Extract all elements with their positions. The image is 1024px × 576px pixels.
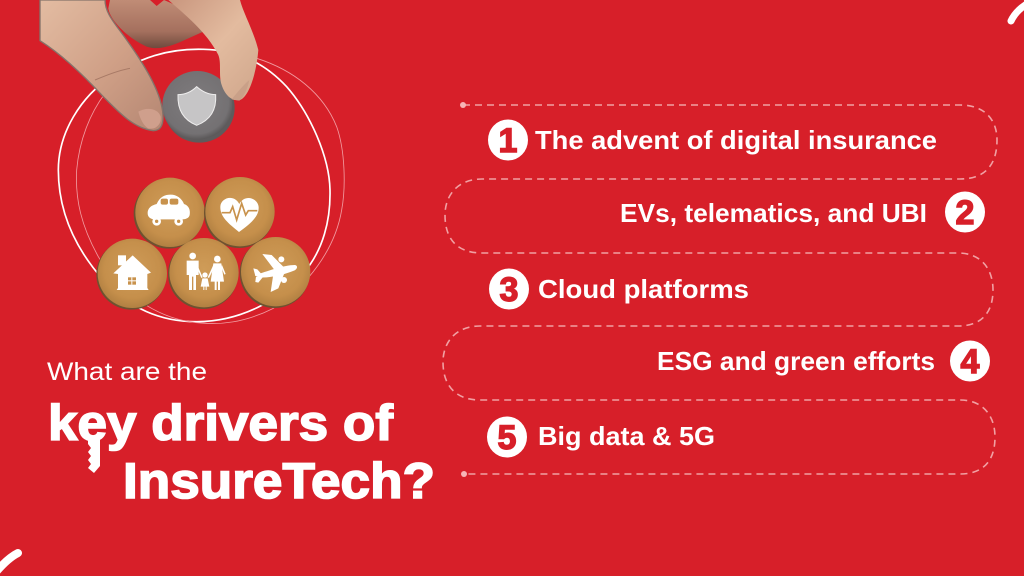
number badge 2	[945, 192, 985, 232]
path end dot	[461, 471, 467, 477]
index fingernail	[232, 80, 249, 101]
corner accent: top right	[1011, 2, 1024, 21]
icon: heart	[220, 198, 259, 232]
path start dot	[460, 102, 466, 108]
icon: key blade	[88, 438, 100, 473]
corner accent: bottom left	[0, 553, 18, 572]
number badge 4: 4	[961, 343, 980, 381]
item 5	[487, 416, 715, 458]
number badge 2: 2	[956, 194, 974, 232]
knuckle crease	[95, 68, 130, 80]
title	[47, 358, 435, 509]
coin: shield	[162, 71, 235, 143]
icon: car	[148, 195, 190, 226]
hand	[40, 0, 258, 131]
coin: house	[96, 239, 167, 310]
coin: car	[134, 178, 205, 249]
thumb and palm	[40, 0, 163, 131]
coin: family	[168, 238, 239, 309]
winding dashed path	[443, 102, 997, 477]
title line: What are the: What are the	[47, 358, 207, 386]
thick white loop	[58, 49, 330, 322]
icon: family	[187, 253, 226, 290]
icon: plane	[253, 254, 297, 292]
middle finger	[108, 0, 203, 48]
coin: heart	[204, 177, 275, 248]
item 4	[657, 340, 990, 382]
label 4: ESG and green efforts	[657, 346, 935, 376]
coin: plane	[240, 237, 310, 308]
label 3: Cloud platforms	[538, 274, 749, 304]
number badge 4	[950, 340, 990, 382]
icon: house	[113, 255, 151, 290]
item 3	[489, 268, 749, 310]
label 2: EVs, telematics, and UBI	[620, 198, 927, 228]
title line: key drivers of: key drivers of	[48, 395, 393, 451]
number badge 1	[488, 120, 528, 160]
number badge 1: 1	[499, 122, 517, 160]
number badge 5: 5	[498, 419, 516, 457]
item 1	[488, 120, 937, 160]
icon: shield	[178, 87, 216, 125]
label 5: Big data & 5G	[538, 421, 715, 451]
title line: InsureTech?: InsureTech?	[123, 453, 435, 509]
number badge 3	[489, 268, 529, 310]
item 2	[620, 192, 985, 232]
label 1: The advent of digital insurance	[535, 125, 937, 155]
thumbnail	[138, 109, 161, 129]
illustration: hand placing shield coin above insurance coins	[40, 0, 344, 324]
number badge 3: 3	[500, 271, 518, 309]
index finger	[168, 0, 258, 100]
thin pink loop	[76, 58, 344, 324]
number badge 5	[487, 416, 527, 458]
